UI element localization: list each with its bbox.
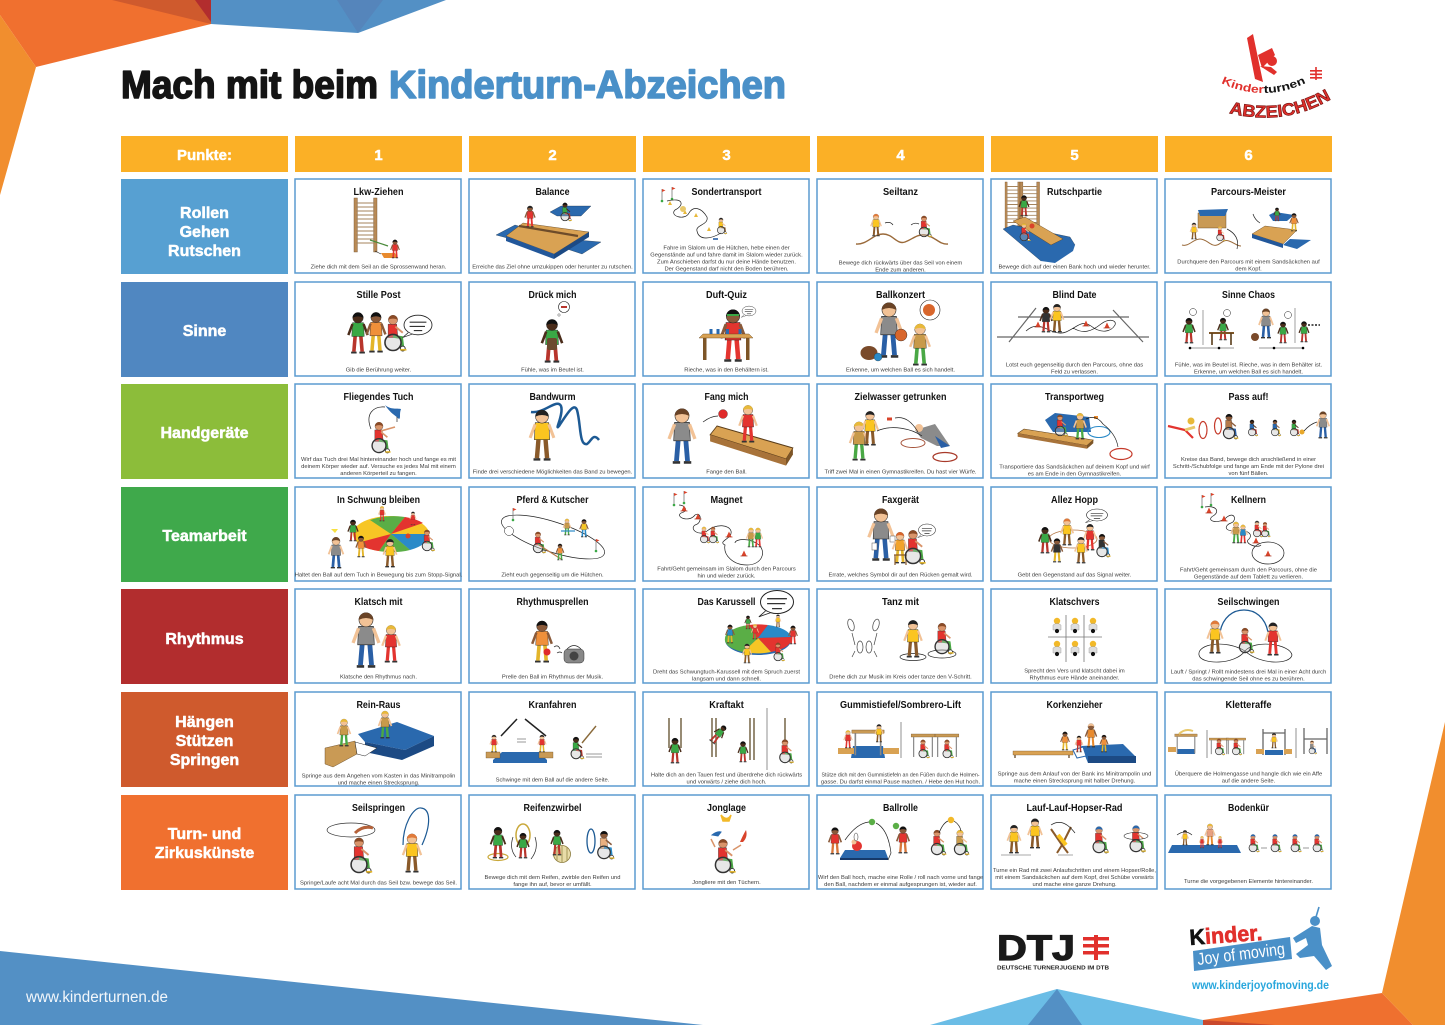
card: Lkw-Ziehen: [295, 179, 461, 273]
description: Haltet den Ball auf dem Tuch in Bewegung bis zum Stopp-Signal.: [295, 572, 463, 578]
description: Erkenne, um welchen Ball es sich handelt.: [846, 368, 955, 374]
card title: Kletteraffe: [1226, 700, 1272, 711]
card: Kellnern: [1165, 487, 1331, 581]
category: Hängen Stützen Springen: Hängen: [175, 714, 234, 731]
card title: Pass auf!: [1228, 392, 1268, 403]
header row: Punkte: 4: [896, 147, 905, 164]
illustration: child smelling at a table: [699, 306, 756, 362]
illustration: wall bars with slide benches: [1003, 182, 1075, 263]
card: Zielwasser getrunken: [817, 384, 983, 478]
card: Klatsch mit: [295, 589, 461, 683]
illustration: throw, roll and catch: [829, 817, 969, 860]
logo: DTJ: DEUTSCHE TURNERJUGEND IM DTB: [997, 966, 1109, 972]
description: Klatsche den Rhythmus nach.: [340, 674, 417, 680]
description: Kreise das Band, bewege dich anschließend in einer: [1181, 457, 1316, 463]
illustration: ropes: [669, 708, 794, 770]
title: Kinderturn-Abzeichen: [389, 64, 786, 107]
description: Fahre im Slalom um die Hütchen, hebe einen der: [663, 246, 790, 252]
card title: Kranfahren: [528, 700, 576, 711]
description: Springe/Laufe acht Mal durch das Seil bzw. bewege das Seil.: [300, 880, 457, 886]
card title: Stille Post: [356, 290, 401, 301]
description: Jongliere mit den Tüchern.: [692, 880, 761, 886]
card: Kranfahren: [469, 692, 635, 786]
card: Lauf-Lauf-Hopser-Rad: [991, 795, 1157, 889]
illustration: child throwing cloth: [369, 405, 401, 453]
card: Seilschwingen: [1165, 589, 1331, 683]
card: Korkenzieher: [991, 692, 1157, 786]
header row: Punkte: [121, 136, 1332, 172]
description: anderen Körperteil zu fangen.: [340, 471, 417, 477]
logo: Kinderturnen Abzeichen: [1222, 34, 1331, 118]
description: Wirf den Ball hoch, mache eine Rolle / roll nach vorne und fange: [818, 875, 983, 881]
category: Turn- und Zirkuskünste: [121, 795, 288, 890]
card title: Pferd & Kutscher: [516, 495, 589, 506]
illustration: parcours overview: [1182, 208, 1311, 249]
header row: Punkte: 2: [548, 147, 557, 164]
description: Bewege dich mit dem Reifen, zwirble den Reifen und: [485, 875, 620, 881]
illustration: adult and child clapping: [353, 613, 400, 668]
description: fange ihn auf, bevor er umfällt.: [513, 882, 592, 888]
description: Feld zu verlassen.: [1051, 370, 1098, 376]
card: Ballrolle: [817, 795, 983, 889]
illustration: hoop tricks: [488, 824, 614, 862]
description: von fünf Bällen.: [1229, 471, 1269, 477]
illustration: parachute game: [329, 506, 435, 568]
card: Tanz mit: [817, 589, 983, 683]
card title: Blind Date: [1052, 290, 1097, 301]
description: Sprecht den Vers und klatscht dabei im: [1024, 668, 1125, 674]
category: Turn- und Zirkuskünste: Turn- und: [168, 826, 241, 843]
card title: Zielwasser getrunken: [854, 392, 946, 403]
category: Handgeräte: Handgeräte: [160, 425, 249, 442]
description: Springe aus dem Anlauf von der Bank ins Minitrampolin und: [998, 772, 1151, 778]
card: Kraftakt: [643, 692, 809, 786]
logo: Kinderturnen Abzeichen: Kinderturnen: [1222, 76, 1306, 93]
description: Schwinge mit dem Ball auf die andere Seite.: [496, 778, 610, 784]
description: Erreiche das Ziel ohne umzukippen oder herunter zu rutschen.: [472, 264, 633, 270]
card: Fliegendes Tuch: [295, 384, 461, 478]
illustration: team slalom: [673, 491, 763, 565]
illustration: blindfolded guide course: [997, 304, 1149, 342]
illustration: tray course: [1201, 493, 1284, 564]
card: Fang mich: [643, 384, 809, 478]
card: Jonglage: [643, 795, 809, 889]
illustration: dance footprints and dancers: [847, 618, 956, 660]
card title: Duft-Quiz: [706, 290, 747, 301]
description: Dreht das Schwungtuch-Karussell mit dem Spruch zuerst: [653, 670, 800, 676]
description: Überquere die Holmengasse und hangle dich wie ein Affe: [1175, 771, 1322, 778]
background shapes: top left: [0, 0, 446, 195]
card title: Bandwurm: [530, 392, 576, 403]
description: mache einen Strecksprung mit halber Drehung.: [1014, 779, 1136, 785]
card: Faxgerät: [817, 487, 983, 581]
card title: Sondertransport: [692, 187, 762, 198]
description: Zum Anschieben darfst du nur deine Hände benutzen.: [657, 260, 796, 266]
description: Lauft / Springt / Rollt mindestens drei Mal in einer Acht durch: [1171, 670, 1326, 676]
card title: Rutschpartie: [1047, 187, 1102, 198]
description: Ziehe dich mit dem Seil an die Sprossenwand heran.: [311, 264, 447, 270]
illustration: clapping grid: [1048, 615, 1102, 662]
description: und mache einen Strecksprung.: [338, 780, 420, 786]
description: Gegenstände auf und fahre damit im Slalom wieder zurück.: [650, 252, 803, 258]
description: Turne ein Rad mit zwei Anlaufschritten und einem Hopser/Rolle,: [993, 868, 1156, 874]
illustration: children in a circle: [1039, 509, 1111, 563]
card: Allez Hopp: [991, 487, 1157, 581]
card title: Rein-Raus: [356, 700, 401, 711]
description: Bewege dich auf der einen Bank hoch und wieder herunter.: [998, 264, 1151, 270]
card title: Drück mich: [528, 290, 576, 301]
illustration: balance over benches and mats: [496, 203, 601, 259]
illustration: catching on a bench: [669, 405, 793, 466]
description: mit einem Sandsäckchen auf dem Kopf, drei Schübe vorwärts: [995, 875, 1154, 881]
description: Prelle den Ball im Rhythmus der Musik.: [502, 674, 603, 680]
description: Triff zwei Mal in einen Gymnastikreifen. Du hast vier Würfe.: [824, 470, 977, 476]
description: Fühle, was im Beutel ist. Rieche, was in dem Behälter ist.: [1175, 362, 1323, 368]
card: Rein-Raus: [295, 692, 461, 786]
logo: DTJ: DTJ: [997, 929, 1075, 968]
description: und vorwärts / ziehe dich hoch.: [687, 780, 767, 786]
category: Hängen Stützen Springen: [121, 692, 288, 787]
header row: Punkte: 5: [1070, 147, 1079, 164]
category: Sinne: Sinne: [183, 323, 226, 340]
illustration: child with bag: [542, 302, 570, 363]
title: Mach mit beim: [121, 64, 378, 107]
card title: Lauf-Lauf-Hopser-Rad: [1026, 803, 1122, 814]
description: Turne die vorgegebenen Elemente hintereinander.: [1184, 879, 1313, 885]
card: Duft-Quiz: [643, 282, 809, 376]
illustration: slalom course: [661, 187, 727, 239]
card title: Kellnern: [1231, 495, 1266, 506]
illustration: walking on a rope: [856, 214, 948, 244]
card: Sinne Chaos: [1165, 282, 1331, 376]
card title: Transportweg: [1045, 392, 1104, 403]
background shapes: bottom left with url: www.kinderturnen.de: [25, 989, 168, 1006]
category: Turn- und Zirkuskünste: Zirkuskünste: [155, 845, 254, 862]
illustration: three children and speech bubble: [348, 312, 432, 354]
illustration: drawing symbol on back: [869, 509, 936, 565]
card title: Magnet: [710, 495, 743, 506]
description: Errate, welches Symbol dir auf den Rücken gemalt wird.: [828, 572, 973, 578]
header row: Punkte: 1: [374, 147, 383, 164]
illustration: run-up and jump: [1013, 723, 1136, 763]
illustration: swinging with a ball: [486, 719, 602, 763]
description: Transportiere das Sandsäckchen auf deinem Kopf und wirf: [999, 464, 1150, 470]
illustration: cartwheel sequence: [1001, 819, 1148, 855]
description: Fahrt/Geht gemeinsam durch den Parcours, ohne die: [1180, 568, 1317, 574]
card title: Bodenkür: [1228, 803, 1269, 814]
description: und mache eine ganze Drehung.: [1032, 882, 1117, 888]
card: Stille Post: [295, 282, 461, 376]
description: Stütze dich mit den Gummistiefeln an den Füßen durch die Holmen-: [822, 772, 980, 778]
card: Seilspringen: [295, 795, 461, 889]
description: den Ball, nachdem er einmal aufgesprungen ist, wieder auf.: [824, 882, 977, 888]
card: Transportweg: [991, 384, 1157, 478]
description: Schritt-/Schubfolge und fange am Ende mit der Pylone drei: [1173, 464, 1324, 470]
description: Fühle, was im Beutel ist.: [521, 368, 584, 374]
description: langsam und dann schnell.: [692, 676, 761, 682]
card title: Klatschvers: [1050, 597, 1100, 608]
card title: Gummistiefel/Sombrero-Lift: [840, 700, 962, 711]
description: Gib die Berührung weiter.: [346, 368, 412, 374]
description: Halte dich an den Tauen fest und überdrehe dich rückwärts: [651, 772, 802, 778]
description: Finde drei verschiedene Möglichkeiten das Band zu bewegen.: [473, 470, 633, 476]
illustration: juggling with scarves: [711, 815, 747, 873]
card title: Seilschwingen: [1218, 597, 1280, 608]
card title: Reifenzwirbel: [524, 803, 582, 814]
card: Parcours-Meister: [1165, 179, 1331, 273]
illustration: rope skipping: [327, 808, 429, 873]
illustration: parachute carousel: [725, 590, 797, 663]
logo: kinder Joy of moving: Kinder.: [1189, 920, 1263, 950]
illustration: swinging rope figure eight: [1199, 610, 1292, 662]
card title: Faxgerät: [882, 495, 920, 506]
logo: kinder Joy of moving: [1189, 907, 1332, 992]
title: [121, 64, 786, 107]
description: Lotst euch gegenseitig durch den Parcours, ohne das: [1006, 362, 1143, 368]
header row: Punkte: 3: [722, 147, 731, 164]
description: Bewege dich rückwärts über das Seil von einem: [839, 260, 962, 266]
category: Teamarbeit: [121, 487, 288, 582]
illustration: carrying sandbag over bench: [1018, 413, 1132, 460]
description: dem Kopf.: [1235, 266, 1262, 272]
card title: In Schwung bleiben: [337, 495, 420, 506]
illustration: pulling around cones: [497, 506, 609, 568]
category: Rollen Gehen Rutschen: Rollen: [180, 205, 229, 222]
card: Ballkonzert: [817, 282, 983, 376]
card: Pass auf!: [1165, 384, 1331, 478]
description: Erkenne, um welchen Ball es sich handelt.: [1194, 370, 1303, 376]
logo: kinder Joy of moving: Joy of moving: [1196, 939, 1286, 969]
description: auf die andere Seite.: [1222, 779, 1276, 785]
description: Springe aus dem Angehen vom Kasten in das Minitrampolin: [302, 774, 455, 780]
card: Rutschpartie: [991, 179, 1157, 273]
category: Teamarbeit: Teamarbeit: [162, 528, 247, 545]
background shapes: bottom left with url: [0, 951, 703, 1025]
description: deinem Körper wieder auf. Versuche es jedes Mal mit einem: [301, 464, 456, 470]
category: Rollen Gehen Rutschen: [121, 179, 288, 274]
description: Drehe dich zur Musik im Kreis oder tanze den V-Schritt.: [829, 674, 972, 680]
background shapes: bottom centre and right: [930, 722, 1445, 1025]
card: Rhythmusprellen: [469, 589, 635, 683]
card: Das Karussell: [643, 589, 809, 683]
description: hin und wieder zurück.: [697, 574, 756, 580]
category: Rhythmus: Rhythmus: [165, 631, 244, 648]
header row: Punkte: Punkte:: [177, 147, 232, 164]
card: Gummistiefel/Sombrero-Lift: [817, 692, 983, 786]
card: Pferd & Kutscher: [469, 487, 635, 581]
logo: Kinderturnen Abzeichen: ABZEICHEN: [1228, 88, 1331, 118]
illustration: box, mini trampoline and mat: [325, 711, 434, 767]
illustration: child pulling on wall bars: [354, 198, 399, 258]
description: Wirf das Tuch drei Mal hintereinander hoch und fange es mit: [301, 457, 456, 463]
description: Zieht euch gegenseitig um die Hütchen.: [501, 572, 604, 578]
card title: Seilspringen: [352, 803, 405, 814]
card title: Allez Hopp: [1051, 495, 1098, 506]
description: Ende zum anderen.: [875, 268, 926, 274]
card: Blind Date: [991, 282, 1157, 376]
description: Gegenstände auf dem Tablett zu verlieren.: [1194, 574, 1303, 580]
card: Klatschvers: [991, 589, 1157, 683]
category: Rollen Gehen Rutschen: Rutschen: [168, 243, 241, 260]
card title: Lkw-Ziehen: [354, 187, 404, 198]
card: Bandwurm: [469, 384, 635, 478]
card title: Korkenzieher: [1046, 700, 1103, 711]
category: Hängen Stützen Springen: Springen: [170, 752, 239, 769]
category: Rollen Gehen Rutschen: Gehen: [180, 224, 229, 241]
illustration: child with ribbon: [530, 404, 599, 461]
card title: Sinne Chaos: [1222, 290, 1275, 301]
card: Balance: [469, 179, 635, 273]
card title: Klatsch mit: [354, 597, 403, 608]
illustration: aiming at hoops: [850, 411, 957, 462]
card title: Rhythmusprellen: [516, 597, 588, 608]
description: Rhythmus eure Hände aneinander.: [1030, 676, 1120, 682]
illustration: sensory stations: [1183, 308, 1320, 349]
illustration: bars and hanging: [1168, 728, 1327, 758]
card title: Kraftakt: [709, 700, 744, 711]
category: Rhythmus: [121, 589, 288, 684]
category: Hängen Stützen Springen: Stützen: [176, 733, 233, 750]
description: es am Ende in den Gymnastikreifen.: [1028, 472, 1122, 478]
illustration: hoop, wheelchair slalom and passing: [1168, 412, 1329, 439]
description: Fahrt/Geht gemeinsam im Slalom durch den Parcours: [657, 567, 796, 573]
logo: kinder Joy of moving: www.kinderjoyofmoving.de: [1191, 978, 1329, 992]
card: In Schwung bleiben: [295, 487, 463, 581]
card title: Fang mich: [704, 392, 748, 403]
description: gasse. Du darfst einmal Pause machen. / Hebe den Hut hoch.: [821, 780, 980, 786]
card: Seiltanz: [817, 179, 983, 274]
illustration: bouncing ball with radio: [532, 621, 584, 663]
category: Sinne: [121, 282, 288, 377]
card: Bodenkür: [1165, 795, 1331, 889]
card title: Balance: [536, 187, 570, 198]
illustration: floor routine: [1168, 824, 1324, 853]
card: Sondertransport: [643, 179, 809, 273]
illustration: adult, child and balls: [860, 300, 940, 366]
card title: Ballrolle: [883, 803, 918, 814]
description: Durchquere den Parcours mit einem Sandsäckchen auf: [1177, 260, 1320, 266]
card title: Fliegendes Tuch: [344, 392, 414, 403]
card: Kletteraffe: [1165, 692, 1331, 786]
card title: Parcours-Meister: [1211, 187, 1286, 198]
card title: Seiltanz: [883, 187, 918, 198]
card: Drück mich: [469, 282, 635, 376]
description: Der Gegenstand darf nicht den Boden berühren.: [664, 266, 789, 272]
description: Rieche, was in den Behältern ist.: [684, 368, 769, 374]
card title: Jonglage: [707, 803, 746, 814]
description: Gebt den Gegenstand auf das Signal weiter.: [1018, 572, 1132, 578]
logo: DTJ: [997, 929, 1109, 972]
category: Handgeräte: [121, 384, 288, 479]
description: das schwingende Seil ohne es zu berühren.: [1192, 676, 1305, 682]
header row: Punkte: 6: [1244, 147, 1253, 164]
description: Fange den Ball.: [706, 470, 747, 476]
card: Reifenzwirbel: [469, 795, 635, 889]
card: Magnet: [643, 487, 809, 581]
illustration: parallel bars: [838, 722, 959, 758]
card title: Ballkonzert: [876, 290, 926, 301]
card title: Tanz mit: [882, 597, 920, 608]
card title: Das Karussell: [698, 597, 756, 608]
